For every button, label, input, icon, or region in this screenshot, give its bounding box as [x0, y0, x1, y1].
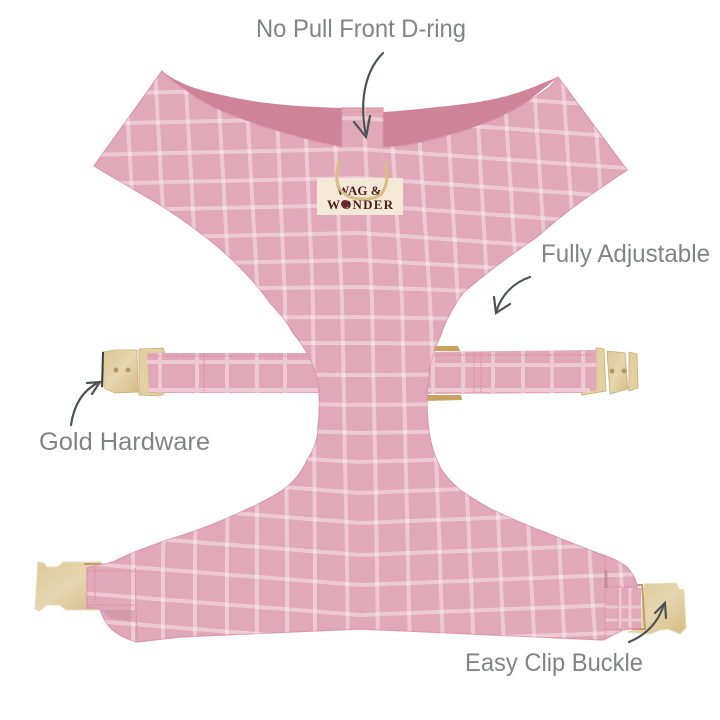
- caption: fully adjustable: Fully Adjustable: [541, 240, 710, 268]
- right waist hardware: [425, 346, 638, 401]
- neck lining: [162, 71, 558, 160]
- plaid grid: [80, 70, 640, 650]
- left waist strap: [147, 353, 325, 393]
- caption: easy clip buckle: Easy Clip Buckle: [465, 649, 643, 677]
- arrow: fully adjustable: [494, 277, 530, 313]
- stitching and seams: [87, 112, 605, 640]
- arrow: d-ring: [354, 53, 383, 137]
- caption: gold hardware: Gold Hardware: [39, 428, 210, 456]
- brand tag: WONDER: [327, 197, 394, 212]
- fabric base: [87, 71, 637, 642]
- right chest strap: [606, 570, 641, 629]
- brand tag: WAG &: [336, 183, 382, 198]
- right chest buckle: [627, 583, 686, 634]
- harness body: [80, 70, 641, 650]
- right waist strap: [420, 350, 596, 394]
- lower left flap shadow: [102, 610, 135, 622]
- D-ring: [337, 160, 387, 199]
- left waist hardware: [102, 348, 165, 396]
- left chest buckle: [35, 562, 102, 611]
- arrow: gold hardware: [71, 382, 100, 425]
- arrow: easy clip buckle: [629, 603, 666, 642]
- caption: no pull front d-ring: No Pull Front D-ring: [256, 15, 466, 43]
- brand tag: [317, 178, 403, 215]
- harness illustration: [35, 70, 686, 650]
